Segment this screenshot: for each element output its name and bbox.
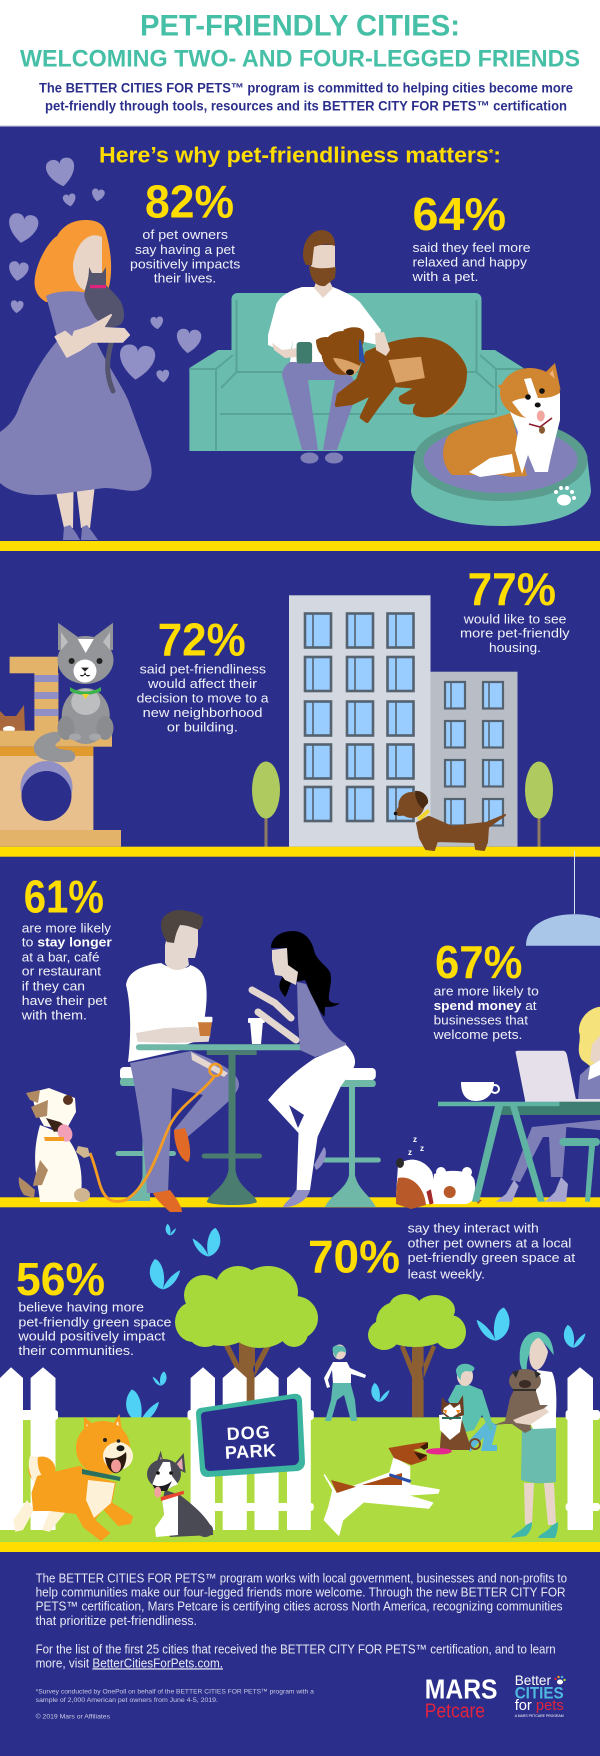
logo: Mars Petcare: Petcare bbox=[425, 1701, 485, 1723]
stat: 61%: at a bar, café bbox=[22, 949, 99, 964]
stat: 82%: positively impacts bbox=[130, 256, 241, 271]
small tree bbox=[368, 1294, 466, 1417]
footer text bbox=[36, 1572, 567, 1670]
left stool bbox=[116, 1067, 176, 1201]
woman with laptop bbox=[496, 1007, 600, 1202]
stat: 64%: 64% bbox=[412, 188, 506, 240]
cat tree bbox=[0, 657, 121, 847]
stat: 72%: said pet-friendliness bbox=[140, 661, 267, 676]
stat: 82%: 82% bbox=[145, 175, 234, 227]
bar table bbox=[136, 1044, 328, 1205]
intro text: The BETTER CITIES FOR PETS™ program is committed to helping cities become more bbox=[39, 80, 573, 95]
stat: 77%: housing. bbox=[489, 640, 541, 655]
logo: Better Cities for Pets bbox=[515, 1672, 566, 1718]
footer text: that prioritize pet-friendliness. bbox=[36, 1614, 197, 1628]
logo: Mars Petcare: MARS bbox=[425, 1673, 498, 1704]
footnote: © 2019 Mars or Affiliates bbox=[36, 1712, 111, 1720]
stat: 70% bbox=[308, 1221, 576, 1283]
man on sofa bbox=[268, 230, 381, 464]
stat: 72% bbox=[137, 614, 269, 735]
woman at table bbox=[252, 931, 355, 1207]
stat: 67%: welcome pets. bbox=[433, 1027, 522, 1042]
divider bar 4 bbox=[0, 1542, 600, 1552]
footer text: more, visit BetterCitiesForPets.com. bbox=[36, 1656, 223, 1670]
footnote: *Survey conducted by OnePoll on behalf of the BETTER CITIES FOR PETS™ program with a bbox=[36, 1689, 314, 1696]
subtitle: WELCOMING TWO- AND FOUR-LEGGED FRIENDS bbox=[20, 46, 580, 73]
cups bbox=[197, 1017, 265, 1044]
stat: 82% bbox=[130, 175, 241, 286]
stat: 64%: said they feel more bbox=[412, 240, 530, 255]
pet bed bbox=[411, 419, 591, 526]
sleep marks: z bbox=[408, 1148, 412, 1157]
intro text: pet-friendly through tools, resources and its BETTER CITY FOR PETS™ certification bbox=[45, 98, 567, 113]
stat: 72%: would affect their bbox=[147, 676, 258, 691]
panel: home scene bbox=[0, 156, 591, 540]
shiba dog bbox=[13, 1414, 133, 1540]
grass bbox=[0, 1417, 600, 1542]
small brown cat bbox=[0, 705, 25, 732]
stat: 77%: 77% bbox=[468, 563, 556, 615]
stat: 56% bbox=[16, 1253, 171, 1358]
seated man bbox=[448, 1364, 497, 1452]
footer text: For the list of the first 25 cities that received the BETTER CITY FOR PETS™ certification, and to learn bbox=[36, 1642, 556, 1656]
stat: 77% bbox=[460, 563, 570, 655]
panel: housing scene bbox=[0, 595, 553, 847]
footer text: help communities make our four-legged friends more welcome. Through the new BETTER CITY FOR bbox=[36, 1586, 566, 1600]
trunk in front of fence bbox=[247, 1372, 254, 1408]
pendant lamp bbox=[526, 851, 600, 946]
left fence bbox=[0, 1367, 58, 1530]
footnote: sample of 2,000 American pet owners from June 4-5, 2019. bbox=[36, 1697, 218, 1704]
stat: 67%: are more likely to bbox=[434, 984, 539, 999]
cafe table with laptop and cup bbox=[438, 1051, 600, 1202]
sleep marks: z bbox=[420, 1144, 424, 1153]
frisbee bbox=[426, 1448, 452, 1455]
stat: 61%: 61% bbox=[24, 870, 104, 922]
intro text bbox=[39, 80, 573, 113]
heading: why it matters: * bbox=[489, 147, 494, 159]
logo: Better Cities for Pets: CITIES bbox=[515, 1683, 564, 1702]
right fence bbox=[566, 1367, 600, 1530]
icon: paw bbox=[554, 486, 576, 506]
dog with tongue out bbox=[19, 1088, 90, 1202]
stat: 61%: are more likely bbox=[22, 920, 112, 935]
title: PET-FRIENDLY CITIES: bbox=[140, 10, 460, 42]
divider bar 3 bbox=[0, 1197, 600, 1207]
sleep marks: z bbox=[413, 1135, 417, 1144]
stat: 70%: say they interact with bbox=[408, 1221, 539, 1236]
stat: 61%: with them. bbox=[21, 1007, 87, 1022]
stat: 67%: spend money at bbox=[434, 998, 537, 1013]
sofa bbox=[189, 293, 524, 451]
stat: 82%: of pet owners bbox=[142, 227, 229, 242]
footer text: The BETTER CITIES FOR PETS™ program works with local government, businesses and non-profits to bbox=[36, 1572, 567, 1586]
tall building bbox=[289, 595, 430, 847]
stat: 61%: if they can bbox=[22, 978, 85, 993]
stat: 64%: with a pet. bbox=[411, 269, 478, 284]
stat: 67%: 67% bbox=[435, 936, 522, 988]
dog on lap bbox=[316, 327, 465, 421]
dachshund bbox=[394, 791, 505, 850]
man at table bbox=[126, 910, 239, 1212]
stat: 64% bbox=[411, 188, 530, 284]
stat: 64%: relaxed and happy bbox=[412, 255, 528, 270]
leash bbox=[90, 1064, 222, 1201]
grey cat bbox=[34, 623, 114, 762]
logo: Mars Petcare bbox=[425, 1673, 498, 1723]
corgi bbox=[443, 363, 561, 477]
heading: why it matters: : bbox=[493, 142, 501, 167]
stat: 61% bbox=[21, 870, 112, 1022]
stat: 56%: would positively impact bbox=[17, 1329, 166, 1344]
panel: dog park scene bbox=[0, 1224, 600, 1542]
sleep marks bbox=[408, 1135, 424, 1157]
divider bar 2 bbox=[0, 847, 600, 857]
panel: cafe scene bbox=[19, 851, 600, 1212]
stat: 82%: say having a pet bbox=[135, 242, 235, 257]
icon: colourful paw bbox=[554, 1676, 566, 1684]
stat: 72%: or building. bbox=[167, 720, 238, 735]
stat: 61%: have their pet bbox=[22, 993, 107, 1008]
short building bbox=[430, 672, 518, 847]
stat: 70%: pet-friendly green space at bbox=[408, 1250, 576, 1265]
trees bbox=[252, 762, 553, 847]
stat: 56%: believe having more bbox=[18, 1300, 144, 1315]
stat: 72%: new neighborhood bbox=[143, 705, 262, 720]
boston terrier bbox=[147, 1451, 213, 1537]
stat: 72%: decision to move to a bbox=[137, 691, 269, 706]
right stool bbox=[322, 1068, 381, 1207]
stat: 70%: least weekly. bbox=[408, 1266, 485, 1281]
footnote bbox=[36, 1689, 314, 1720]
header bbox=[0, 10, 600, 126]
stat: 67% bbox=[433, 936, 539, 1042]
stat: 77%: more pet-friendly bbox=[460, 626, 570, 641]
divider bar 1 bbox=[0, 541, 600, 551]
stat: 70%: other pet owners at a local bbox=[408, 1235, 572, 1250]
logo: Better Cities for Pets: A MARS PETCARE PROGRAM bbox=[515, 1714, 564, 1718]
sleeping dog bbox=[396, 1135, 482, 1209]
stat: 56%: their communities. bbox=[18, 1343, 134, 1358]
stat: 56%: pet-friendly green space bbox=[18, 1314, 171, 1329]
stat: 70%: 70% bbox=[308, 1231, 400, 1283]
hearts bbox=[6, 156, 202, 383]
dog park sign: PARK bbox=[224, 1440, 277, 1463]
woman with pug bbox=[494, 1332, 558, 1538]
butterflies bbox=[126, 1224, 585, 1423]
stat: 61%: or restaurant bbox=[22, 964, 101, 979]
jack russell dog bbox=[324, 1442, 452, 1535]
stat: 67%: businesses that bbox=[434, 1012, 528, 1027]
logo: Better Cities for Pets: Better bbox=[515, 1672, 551, 1688]
heading: why it matters: Here’s why pet-friendliness matters bbox=[99, 142, 470, 167]
stat: 82%: their lives. bbox=[154, 271, 216, 286]
footer text: PETS™ certification, Mars Petcare is certifying cities across North America, recognizing communities bbox=[36, 1600, 563, 1614]
stat: 56%: 56% bbox=[16, 1253, 105, 1305]
woman holding cat bbox=[0, 220, 152, 540]
big tree bbox=[175, 1266, 318, 1407]
husky dog bbox=[439, 1395, 480, 1450]
dog park sign: DOG bbox=[226, 1422, 271, 1444]
middle fence bbox=[188, 1367, 314, 1530]
thrower figure bbox=[324, 1344, 366, 1421]
stat: 77%: would like to see bbox=[463, 611, 566, 626]
logo: Better Cities for Pets: for pets bbox=[515, 1697, 564, 1714]
dog park sign bbox=[196, 1394, 305, 1477]
stat: 61%: to stay longer bbox=[22, 935, 112, 950]
stat: 72%: 72% bbox=[158, 614, 246, 666]
